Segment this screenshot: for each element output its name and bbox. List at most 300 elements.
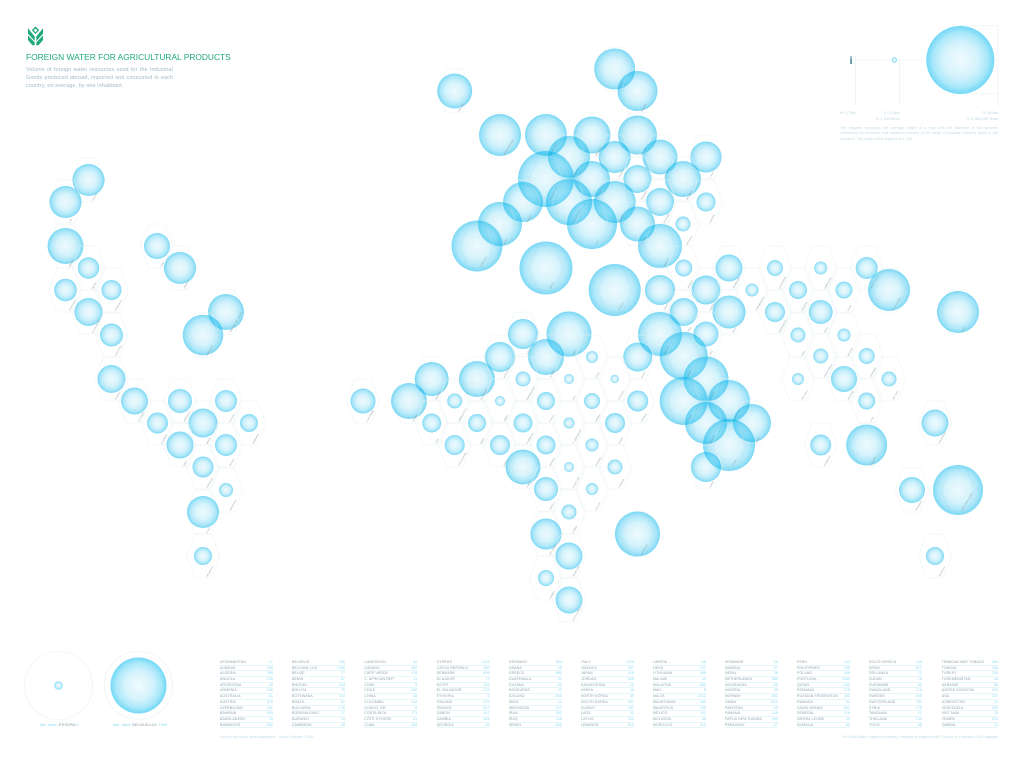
bubble: Guatemala: BELIZE: [92, 282, 98, 290]
table column 6: 387: [628, 700, 634, 704]
bubble: Barbados: [183, 313, 223, 357]
bubble: Indonesia: [895, 468, 929, 512]
table column 6: KENYA: [581, 688, 593, 692]
table column 2: 57: [341, 677, 345, 681]
bubble: Iraq: IRAQ: [709, 349, 714, 356]
table column 7: 48: [702, 660, 706, 664]
table column 1: 560: [267, 723, 273, 727]
bubble: Panama south: [95, 357, 128, 401]
table column 6: 267: [628, 666, 634, 670]
bubble: Iran: IRAN: [732, 327, 737, 334]
table column 3: CÔTE D'IVOIRE: [364, 717, 392, 721]
bubble: Japan: [937, 290, 979, 334]
bubble: Switzerland: [546, 179, 592, 225]
bubble: Norway: [594, 47, 635, 91]
table column 1: AFGHANISTAN: [220, 660, 246, 664]
bubble: Guyana: GUYANA: [229, 413, 236, 422]
table column 10: [869, 660, 922, 728]
bubble: Congo, DR: CONGO, DR: [573, 477, 581, 488]
bubble: Burkina Faso: SIERRA LEONE: [457, 407, 468, 422]
table column 10: 149: [916, 660, 922, 664]
bubble: Moldova: BULGARIA: [663, 212, 671, 224]
table column 1: [220, 660, 273, 728]
bubble: Cape Verde: [346, 379, 380, 423]
bubble: Netherlands: [525, 113, 567, 157]
bubble: Guinea coast: TOGO: [435, 438, 440, 444]
table column 6: LATVIA: [581, 717, 594, 721]
bubble: Venezuela: [163, 379, 197, 423]
table column 10: TOGO: [869, 723, 880, 727]
bubble: Ukraine: [689, 180, 723, 224]
bubble: Israel: [660, 332, 708, 380]
table column 11: VENEZUELA: [942, 706, 964, 710]
bubble: Italy: [567, 199, 617, 249]
table column 5: 283: [556, 711, 562, 715]
bubble: Austria: AUSTRIA: [617, 214, 625, 224]
table column 9: RWANDA: [797, 700, 813, 704]
bubble: Honduras: GUATEMALA: [68, 299, 78, 312]
table column 5: GUYANA: [509, 683, 524, 687]
bubble: France: [503, 180, 543, 224]
bubble: Azerbaijan: AZERBAIJAN: [732, 276, 741, 290]
table column 1: 161: [267, 706, 273, 710]
table column 10: THAILAND: [869, 717, 887, 721]
bubble: Saudi Arabia: [708, 379, 750, 423]
table column 4: CZECH REPUBLIC: [437, 666, 469, 670]
table column 5: 93: [558, 683, 562, 687]
bubble: Cambodia: [804, 423, 837, 467]
table column 4: GEORGIA: [437, 723, 454, 727]
table column 3: CAPE VERDE: [364, 671, 388, 675]
table column 11: TURKEY: [942, 671, 957, 675]
table column 5: 654: [556, 660, 562, 664]
bubble: Mexico: [48, 224, 84, 268]
bubble: Turkmenistan: TURKMENISTAN: [755, 296, 766, 312]
table column 2: BELARUS: [292, 660, 309, 664]
bubble: Netherlands: NETHERLANDS: [549, 141, 559, 156]
bubble: Oman: OMAN: [732, 459, 738, 466]
bubble: Egypt: EGYPT: [641, 371, 647, 378]
table column 10: 66: [918, 683, 922, 687]
bubble: Argentina: [209, 468, 243, 512]
bubble: Thailand: [846, 423, 887, 467]
bubble: Algeria area: [506, 312, 540, 356]
bubble: Yemen: [689, 445, 723, 489]
bubble: Sweden: [618, 69, 658, 113]
bubble: Trinidad and Tobago: [208, 290, 244, 334]
table column 1: 334: [267, 666, 273, 670]
scale diagram: [850, 25, 998, 105]
bubble: Denmark: [574, 113, 610, 157]
bubble: Tanzania: [598, 445, 632, 489]
table column 6: 45: [630, 688, 634, 692]
table column 9: PORTUGAL: [797, 677, 817, 681]
table column 10: 72: [918, 671, 922, 675]
bubble: Iraq: [689, 312, 723, 356]
bubble: Lebanon: [638, 312, 682, 356]
bubble: Greece: [638, 224, 682, 268]
bubble: Australia: [933, 465, 983, 515]
table column 6: 19: [630, 683, 634, 687]
bubble: Mexico: MEXICO: [69, 259, 75, 268]
table column 7: LITHUANIA: [653, 671, 672, 675]
bubble: Australia south: AUSTRALIA: [938, 565, 946, 578]
bubble: Albania: ALBANIA: [640, 236, 648, 246]
bubble: Lithuania: [642, 135, 678, 179]
table column 10: SYRIA: [869, 706, 880, 710]
bubble: Mauritania north: [459, 357, 495, 401]
table column 8: 95: [774, 683, 778, 687]
min value label: Min. Value: ETHIOPIA 5: [40, 723, 78, 727]
scale label: large sphere: D: 16,8m: [982, 110, 998, 115]
table column 11: TUNISIA: [942, 666, 956, 670]
table column 5: 45: [558, 666, 562, 670]
min value sphere: [24, 652, 92, 720]
table column 11: 55: [994, 683, 998, 687]
table column 5: INDONESIA: [509, 706, 529, 710]
table column 9: RUSSIAN FEDERATION: [797, 694, 838, 698]
table column 3: 11: [413, 677, 417, 681]
bubble: Botswana: [529, 512, 563, 556]
table column 11: TRINIDAD AND TOBAGO: [942, 660, 984, 664]
bubble: Nepal: NEPAL: [823, 326, 830, 334]
table column 1: 106: [267, 677, 273, 681]
bubble: Myanmar: [850, 334, 883, 378]
bubble: Iceland: [437, 69, 472, 113]
table column 11: UKRAINE: [942, 683, 958, 687]
scale label: small sphere: V: 1,000 litres: [876, 116, 900, 121]
table column 11: ZAMBIA: [942, 723, 955, 727]
table column 10: 144: [916, 717, 922, 721]
bubble: Thailand: THAILAND: [869, 456, 877, 466]
table column 9: QATAR: [797, 683, 809, 687]
bubble: Germany: [548, 135, 590, 179]
table column 10: SRI LANKA: [869, 671, 888, 675]
bubble: Portugal: PORTUGAL: [480, 255, 488, 268]
table column 7: 241: [700, 711, 706, 715]
table column 2: 344: [339, 694, 345, 698]
bubble: Egypt: [621, 335, 654, 379]
bubble: Lebanon: LEBANON: [663, 345, 671, 356]
table column 7: MALAWI: [653, 677, 667, 681]
bubble: Mauritania: [391, 379, 427, 423]
bubble: Brazil: BRAZIL: [206, 436, 212, 444]
table column 9: 591: [844, 706, 850, 710]
small sphere: [892, 58, 896, 62]
max value sphere: [104, 652, 172, 720]
scale note: The diagram compares the average height of a man with the diameter of two spheres containing the minimum and maximum volume of the range of possible volumes found in the research. The scale of the diagram is 1:330.: [840, 126, 998, 141]
bubble: Malaysia: MALAYSIA: [847, 390, 855, 400]
bubble: Senegal: [415, 357, 449, 401]
table column 2: BELGIUM-LUX.: [292, 666, 318, 670]
table column 3: 169: [411, 723, 417, 727]
scale label: man: H: 1,75m: [840, 110, 856, 115]
bubble: Algeria: ALGERIA: [549, 369, 556, 378]
table column 7: MAURITIUS: [653, 706, 673, 710]
table column 6: LEBANON: [581, 723, 599, 727]
table column 4: 42: [485, 723, 490, 727]
table column 5: INDIA: [509, 700, 519, 704]
table column 9: 80: [846, 723, 850, 727]
bubble: Nepal: [804, 290, 837, 334]
table column 8: 145: [772, 711, 778, 715]
bubble: Switzerland: SWITZERLAND: [572, 209, 582, 224]
table column 6: JAMAICA: [581, 666, 597, 670]
table column 3: CHILE: [364, 688, 375, 692]
table column 1: 17: [269, 660, 273, 664]
bubble: Portugal: [452, 220, 502, 272]
scale label: small sphere: D: 1,24m: [884, 110, 900, 115]
table column 2: 77: [341, 671, 345, 675]
bubble: Georgia: GEORGIA: [686, 279, 694, 290]
bubble: Trinidad and Tobago: TRINIDAD AND TOBAGO: [229, 311, 244, 334]
bubble: Belgium-Lux: BELGIUM-LUX.: [550, 186, 559, 200]
bubble: Turkey: TURKEY: [664, 303, 670, 312]
table column 6: JORDAN: [581, 677, 596, 681]
bubble: Qatar: [685, 401, 727, 445]
bubble: Panama: COSTA RICA: [114, 344, 123, 356]
bubble: Armenia: ARMENIA: [709, 301, 716, 312]
table column 5: ICELAND: [509, 694, 525, 698]
table column 9: SIERRA LEONE: [797, 717, 824, 721]
table column 9: 278: [844, 688, 850, 692]
table column 6: KUWAIT: [581, 706, 595, 710]
bubble: Myanmar: MYANMAR: [869, 367, 878, 378]
bubble: Senegal: SENEGAL: [434, 390, 442, 400]
bubble: Moldova east: MOLDOVA: [686, 235, 694, 246]
bubble: Austria: [594, 180, 636, 224]
bubble: Venezuela: VENEZUELA: [183, 410, 192, 422]
table column 4: 178: [483, 688, 490, 692]
table column 7: 8: [704, 688, 706, 692]
table column 4: GAMBIA: [437, 717, 451, 721]
bubble: Ecuador: ECUADOR: [160, 434, 168, 444]
table column 5: [508, 660, 562, 728]
bubble: Kazakhstan: KAZAKHSTAN: [778, 276, 787, 290]
table column 10: SWAZILAND: [869, 688, 890, 692]
table column 3: 52: [413, 660, 417, 664]
bubble: Algeria: [528, 335, 564, 379]
table column 5: HONDURAS: [509, 688, 530, 692]
table column 2: BRAZIL: [292, 700, 305, 704]
bubble: Costa Rica: [72, 290, 105, 334]
bubble: Nigeria: [575, 379, 609, 423]
table column 4: ETHIOPIA: [437, 694, 454, 698]
table column 8: NORWAY: [725, 694, 741, 698]
table column 11: VIET NAM: [942, 711, 959, 715]
bubble: Bolivia: [209, 423, 243, 467]
table column 6: JAPAN: [581, 671, 593, 675]
bubble: Rwanda: RWANDA: [549, 457, 556, 466]
table column 6: 1029: [626, 660, 634, 664]
table column 4: EL SALVADOR: [437, 688, 462, 692]
bubble: Suriname: SURINAME: [252, 433, 260, 444]
icon: green leaf logo: [28, 26, 43, 46]
table column 10: SURINAME: [869, 683, 888, 687]
bubble: Argentina: ARGENTINA: [229, 499, 238, 512]
table column 7: 556: [700, 683, 706, 687]
table column 1: 29: [269, 717, 273, 721]
bubble: Cameroon: [506, 401, 540, 445]
bubble: Jamaica: [163, 246, 197, 290]
bubble: Rwanda: [529, 423, 563, 467]
bubble: Malta: [520, 242, 572, 294]
bubble: Bolivia: BOLIVIA: [229, 457, 236, 466]
table column 11: 34: [994, 677, 998, 681]
table column 8: 27: [774, 723, 778, 727]
bubble: Chad: [575, 335, 609, 379]
bubble: Paraguay: [186, 445, 220, 489]
table column 2: 38: [341, 723, 345, 727]
table column 6: 232: [628, 717, 634, 721]
table column 7: MALI: [653, 688, 662, 692]
table column 2: [292, 660, 345, 728]
bubble: Costa Rica: EL SALVADOR: [91, 319, 101, 334]
table column 8: [725, 660, 778, 728]
bubble: Suriname: [232, 401, 266, 445]
bubble: China north: [850, 246, 883, 290]
table column 11: USA: [942, 694, 949, 698]
table column 3: COSTA RICA: [364, 711, 386, 715]
table column 6: 32: [630, 711, 634, 715]
bubble: Philippines: [918, 401, 952, 445]
bubble: Panama: [95, 313, 128, 357]
bubble: Côte d'Ivoire: BENIN: [481, 438, 486, 444]
table column 6: 416: [628, 671, 634, 675]
bubble: Albania: [620, 202, 655, 246]
bubble: Chile: CHILE: [207, 527, 212, 534]
bubble: Barbados: BARBADOS: [206, 344, 214, 356]
table column 11: 23: [994, 723, 998, 727]
bubble: Peru: PERU: [184, 460, 189, 466]
bubble: Malta: MALTA: [549, 282, 555, 290]
bubble: South Africa: [552, 578, 586, 622]
table column 10: 75: [918, 677, 922, 681]
large sphere: [926, 26, 994, 94]
bubble: USA: USA: [68, 218, 73, 224]
table column 10: 176: [916, 706, 922, 710]
table column 11: 43: [994, 700, 998, 704]
bubble: India: [781, 313, 815, 357]
bubble: Philippines: PHILIPPINES: [939, 432, 947, 444]
table column 2: 1399: [337, 666, 345, 670]
bubble: Ethiopia: [598, 357, 631, 401]
table column 9: [797, 660, 850, 728]
bubble: Botswana: BOTSWANA: [549, 543, 558, 556]
table column 8: 43: [774, 706, 778, 710]
table column 1: ARGENTINA: [220, 683, 242, 687]
bubble: C. African Rep.: [552, 401, 586, 445]
table column 1: 61: [269, 694, 273, 698]
table column 10: 68: [918, 723, 922, 727]
table column 4: 1143: [482, 660, 490, 664]
table column 6: SOUTH KOREA: [581, 700, 608, 704]
bubble: Afghanistan area: [781, 268, 815, 312]
table column 3: CHINA: [364, 694, 376, 698]
table column 5: 14: [558, 700, 562, 704]
bubble: Yemen neighbour: SOMALIA: [640, 412, 648, 422]
bubble: Chad: CHAD: [595, 371, 601, 378]
table column 4: FINLAND: [437, 700, 452, 704]
bubble: Nicaragua: [95, 268, 128, 312]
table column 1: 575: [267, 700, 273, 704]
table column 1: 69: [269, 683, 273, 687]
table column 9: SOMALIA: [797, 723, 813, 727]
table column 7: 213: [700, 723, 706, 727]
table column 4: EGYPT: [437, 683, 449, 687]
table column 2: BULGARIA: [292, 706, 311, 710]
table column 10: SPAIN: [869, 666, 880, 670]
bubble: Cuba: CUBA: [160, 260, 166, 268]
bubble: Tanzania: TANZANIA: [618, 478, 626, 488]
table column 4: FRANCE: [437, 706, 452, 710]
table column 8: PAPUA NEW GUINEA: [725, 717, 762, 721]
bubble: Mauritania north: MAURITANIA: [480, 388, 489, 400]
table column 9: PHILIPPINES: [797, 666, 820, 670]
bubble: Canada: [72, 158, 105, 202]
bubble: Hungary area: [621, 157, 654, 201]
table column 3: 252: [411, 666, 417, 670]
table column 8: 27: [774, 666, 778, 670]
bubble: Syria: [667, 290, 700, 334]
table column 3: 173: [411, 711, 417, 715]
bubble: Iceland: ICELAND: [457, 103, 465, 112]
bubble: Qatar: BAHRAIN: [709, 435, 716, 444]
table column 8: NEPAL: [725, 671, 737, 675]
table column 9: 29: [846, 717, 850, 721]
bubble: Saudi Arabia: SAUDI ARABIA: [732, 408, 742, 422]
bubble: Bhutan: BHUTAN: [847, 347, 854, 356]
bubble: Oman: [703, 419, 755, 471]
table column 6: [581, 660, 634, 728]
table column 4: 191: [483, 683, 490, 687]
bubble: Bangladesh: [804, 334, 837, 378]
table column 8: PANAMA: [725, 711, 740, 715]
table column 4: GABON: [437, 711, 450, 715]
table column 5: GERMANY: [509, 660, 527, 664]
table column 10: 21: [918, 711, 922, 715]
bubble: Cuba: [140, 224, 174, 268]
bubble: Burkina: BURKINA FASO: [526, 385, 536, 400]
table column 7: 709: [700, 706, 706, 710]
table column 3: C. AFRICAN REP.: [364, 677, 394, 681]
table column 7: 1012: [698, 694, 706, 698]
bubble: Angola: ANGOLA: [549, 501, 556, 510]
bubble: Gabon: [506, 445, 540, 489]
bubble: Turkey: [643, 268, 677, 312]
bubble: Georgia: [667, 246, 700, 290]
table column 1: BANGLADESH: [220, 717, 245, 721]
table column 3: 128: [411, 671, 417, 675]
bubble: Burundi: BURUNDI: [596, 457, 602, 466]
table column 2: 176: [339, 706, 345, 710]
table column 4: 5: [488, 694, 490, 698]
table column 8: 561: [772, 694, 778, 698]
table column 8: 65: [774, 688, 778, 692]
table column 5: IRAN: [509, 711, 518, 715]
bubble: China: CHINA: [847, 304, 853, 312]
bubble: Mauritania: GAMBIA: [412, 413, 419, 422]
bubble: Lithuania: LITHUANIA: [663, 167, 671, 178]
bubble: Greece: GREECE: [664, 258, 670, 268]
bubble: Cyprus: CYPRUS: [618, 302, 625, 312]
bubble: Canada: CANADA: [91, 192, 99, 202]
bubble: Morocco: MOROCCO: [504, 368, 511, 378]
bubble: Germany: GERMANY: [572, 167, 580, 178]
bubble: Liberia: LIBERIA: [503, 414, 510, 422]
table column 11: 393: [992, 688, 998, 692]
table column 10: SWEDEN: [869, 694, 885, 698]
